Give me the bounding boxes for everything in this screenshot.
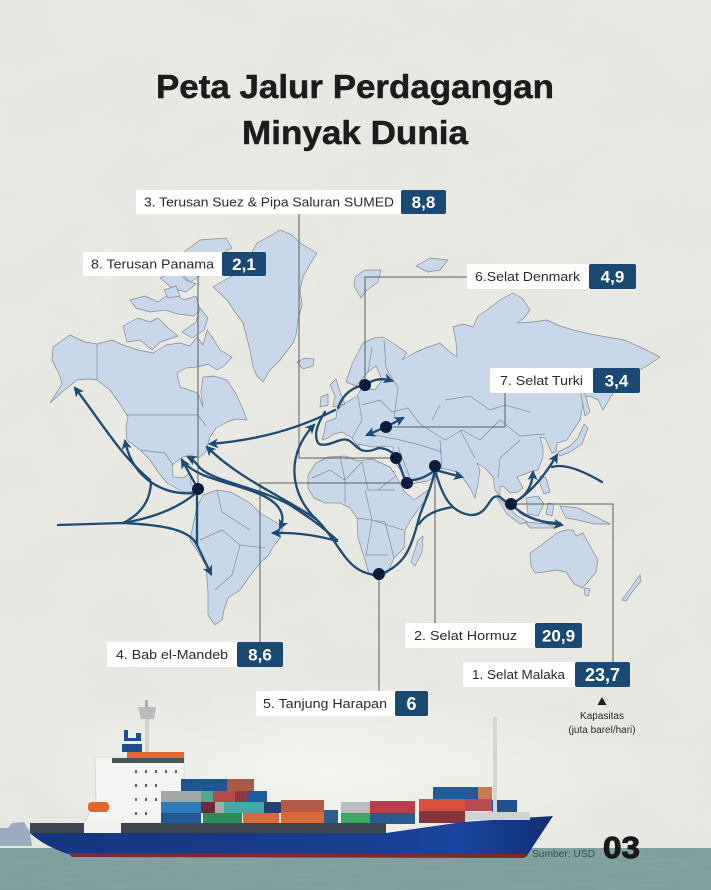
capacity note: (juta barel/hari) (568, 725, 636, 736)
label: Selat Turki: 7. Selat Turki (500, 373, 583, 388)
ship funnel (122, 730, 142, 752)
label: Selat Denmark: 4,9 (601, 268, 624, 286)
label: Tanjung Harapan (256, 691, 428, 716)
world map (50, 230, 660, 625)
containers aft stack (161, 779, 338, 824)
label: Selat Hormuz (405, 623, 582, 648)
land: Southeast Asia islands (497, 476, 610, 528)
ship mast (138, 700, 156, 753)
distant skyline (0, 822, 32, 846)
sea (0, 848, 711, 890)
leader lines (198, 214, 613, 691)
shipping routes (58, 379, 602, 575)
hull (30, 816, 553, 857)
page number: 03 (603, 830, 640, 865)
label: Selat Denmark: 6.Selat Denmark (475, 269, 581, 284)
label: Tanjung Harapan: 6 (406, 694, 417, 714)
title: Minyak Dunia (242, 114, 469, 151)
label: Terusan Panama: 2,1 (232, 255, 256, 274)
land: Africa (308, 456, 428, 579)
label: Selat Turki: 3,4 (605, 372, 629, 390)
title (156, 68, 554, 151)
land: North America (50, 330, 247, 492)
label: Selat Turki (490, 368, 640, 393)
capacity note: Kapasitas (580, 711, 624, 722)
label: Terusan Suez: 8,8 (412, 193, 435, 212)
label: Terusan Panama (83, 252, 266, 276)
land: South America (190, 490, 283, 625)
superstructure (84, 757, 184, 823)
label: Tanjung Harapan: 5. Tanjung Harapan (263, 696, 387, 711)
label: Selat Denmark (467, 264, 636, 289)
source: Sumber: USD (532, 849, 595, 860)
containers fore stack (341, 787, 517, 824)
strait markers (192, 379, 517, 580)
label: Terusan Panama: 8. Terusan Panama (91, 256, 215, 272)
label: Terusan Suez: 3. Terusan Suez & Pipa Saluran SUMED (144, 194, 394, 210)
land: Canadian arctic islands (123, 238, 232, 350)
label: Bab el-Mandeb: 4. Bab el-Mandeb (116, 647, 228, 662)
label: Terusan Suez (136, 190, 446, 214)
land: Great Britain and Ireland (320, 379, 345, 407)
land: Australia (530, 530, 598, 588)
label: Selat Hormuz: 2. Selat Hormuz (414, 628, 517, 643)
country borders (97, 340, 545, 590)
ship (30, 700, 553, 858)
land: Eurasia (322, 293, 660, 503)
label: Bab el-Mandeb (107, 642, 283, 667)
land: Japan and Sakhalin (558, 390, 590, 456)
label: Selat Malaka: 23,7 (585, 665, 620, 685)
label: Selat Malaka (463, 662, 630, 687)
fore mast (493, 717, 497, 812)
label: Selat Malaka: 1. Selat Malaka (472, 667, 566, 682)
land: Madagascar (411, 536, 423, 566)
land: Iceland and Svalbard (297, 258, 448, 369)
title: Peta Jalur Perdagangan (156, 68, 554, 105)
land: New Zealand and Tasmania (584, 575, 641, 601)
label: Selat Hormuz: 20,9 (542, 626, 575, 646)
label: Bab el-Mandeb: 8,6 (248, 646, 272, 664)
capacity note (568, 697, 636, 736)
land: Greenland (213, 230, 317, 382)
